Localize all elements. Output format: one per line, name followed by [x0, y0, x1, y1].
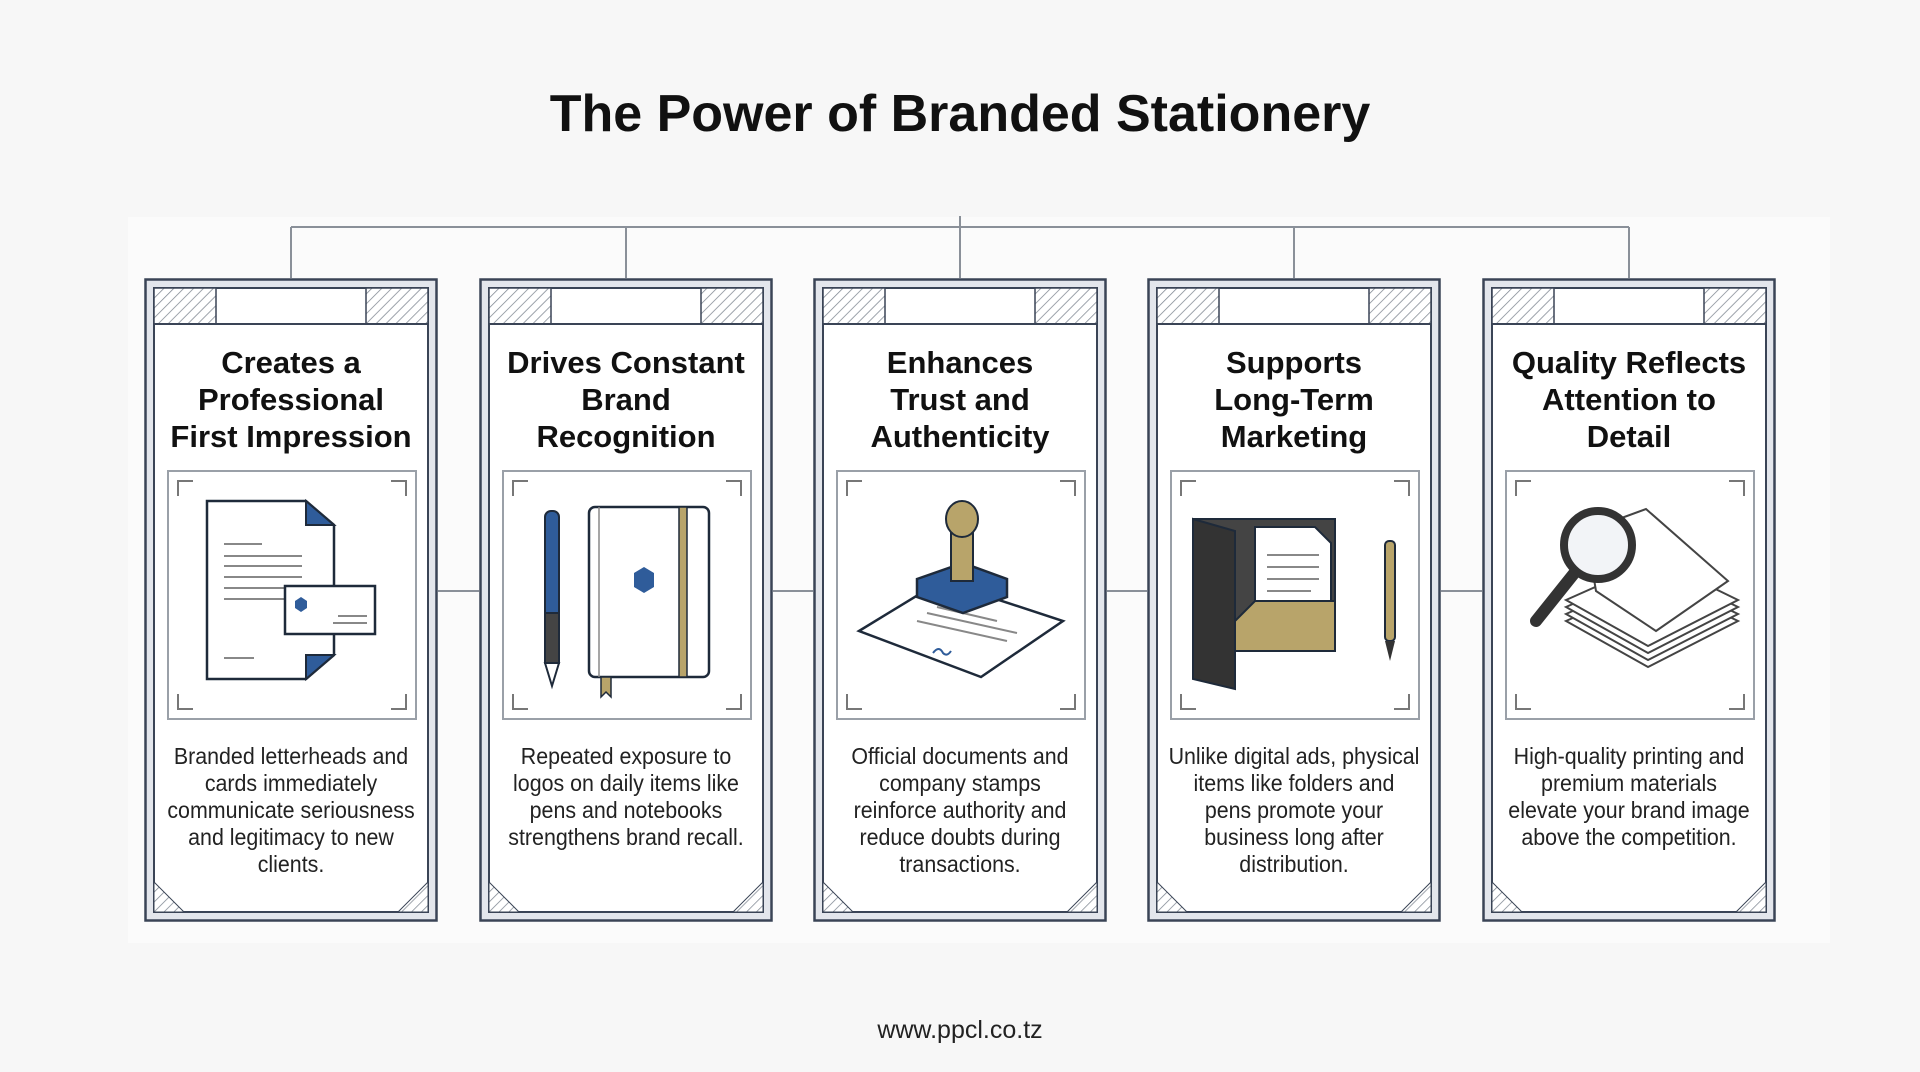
card 3 body text: reduce doubts during — [860, 824, 1060, 850]
icon: pen and notebook — [544, 506, 710, 699]
card 3 body text: reinforce authority and — [854, 797, 1066, 823]
card 5 body text: High-quality printing and — [1514, 743, 1744, 769]
icon: company stamp on document — [856, 500, 1066, 678]
card 1 body text: communicate seriousness — [167, 797, 415, 823]
card 3 body text: transactions. — [899, 851, 1021, 877]
card 3 heading — [870, 345, 1050, 454]
card 2 heading: Brand — [581, 382, 671, 417]
card 3 heading: Enhances — [887, 345, 1033, 380]
card 2 — [479, 278, 773, 922]
card 5 — [1482, 278, 1776, 922]
card 2 body text: strengthens brand recall. — [508, 824, 744, 850]
card 3 body text: Official documents and — [851, 743, 1069, 769]
card 5 body text: premium materials — [1541, 770, 1717, 796]
card 3 — [813, 278, 1107, 922]
card 5 body text — [1508, 743, 1750, 850]
card 2 body text: logos on daily items like — [513, 770, 739, 796]
card 4 body text: business long after — [1204, 824, 1384, 850]
card 4 body text: pens promote your — [1205, 797, 1383, 823]
card 3 body text: company stamps — [879, 770, 1041, 796]
card 1 body text: clients. — [258, 851, 324, 877]
icon: folder with document and pen — [1192, 518, 1396, 690]
card 1 heading: Professional — [198, 382, 384, 417]
card 1 heading — [170, 345, 412, 454]
title: The Power of Branded Stationery — [550, 85, 1370, 143]
card 5 body text: above the competition. — [1521, 824, 1737, 850]
card 4 heading: Marketing — [1221, 419, 1367, 454]
icon: magnifier over paper stack — [1530, 507, 1740, 668]
card 4 body text: distribution. — [1239, 851, 1349, 877]
card 1 body text — [167, 743, 415, 877]
card 3 body text — [851, 743, 1069, 877]
card 1 — [144, 278, 438, 922]
card 2 body text: pens and notebooks — [530, 797, 722, 823]
card 4 heading: Supports — [1226, 345, 1362, 380]
card 4 heading — [1214, 345, 1374, 454]
card 4 — [1147, 278, 1441, 922]
card 2 heading — [507, 345, 745, 454]
card 3 heading: Authenticity — [870, 419, 1050, 454]
card 2 body text: Repeated exposure to — [521, 743, 731, 769]
card 5 heading: Detail — [1587, 419, 1671, 454]
card 4 body text: items like folders and — [1194, 770, 1394, 796]
card 4 body text: Unlike digital ads, physical — [1169, 743, 1419, 769]
card 1 body text: cards immediately — [205, 770, 377, 796]
card 2 heading: Recognition — [536, 419, 716, 454]
card 4 body text — [1169, 743, 1419, 877]
card 4 heading: Long-Term — [1214, 382, 1374, 417]
icon: letterhead and business card — [206, 499, 376, 681]
card 2 heading: Drives Constant — [507, 345, 745, 380]
card 1 body text: and legitimacy to new — [188, 824, 394, 850]
card 1 body text: Branded letterheads and — [174, 743, 408, 769]
card 5 heading: Quality Reflects — [1512, 345, 1746, 380]
card 5 body text: elevate your brand image — [1508, 797, 1750, 823]
card 5 heading: Attention to — [1542, 382, 1716, 417]
card 1 heading: First Impression — [170, 419, 412, 454]
footer url: www.ppcl.co.tz — [877, 1016, 1043, 1044]
card 5 heading — [1512, 345, 1746, 454]
card 1 heading: Creates a — [221, 345, 361, 380]
card 2 body text — [508, 743, 744, 850]
card 3 heading: Trust and — [890, 382, 1030, 417]
